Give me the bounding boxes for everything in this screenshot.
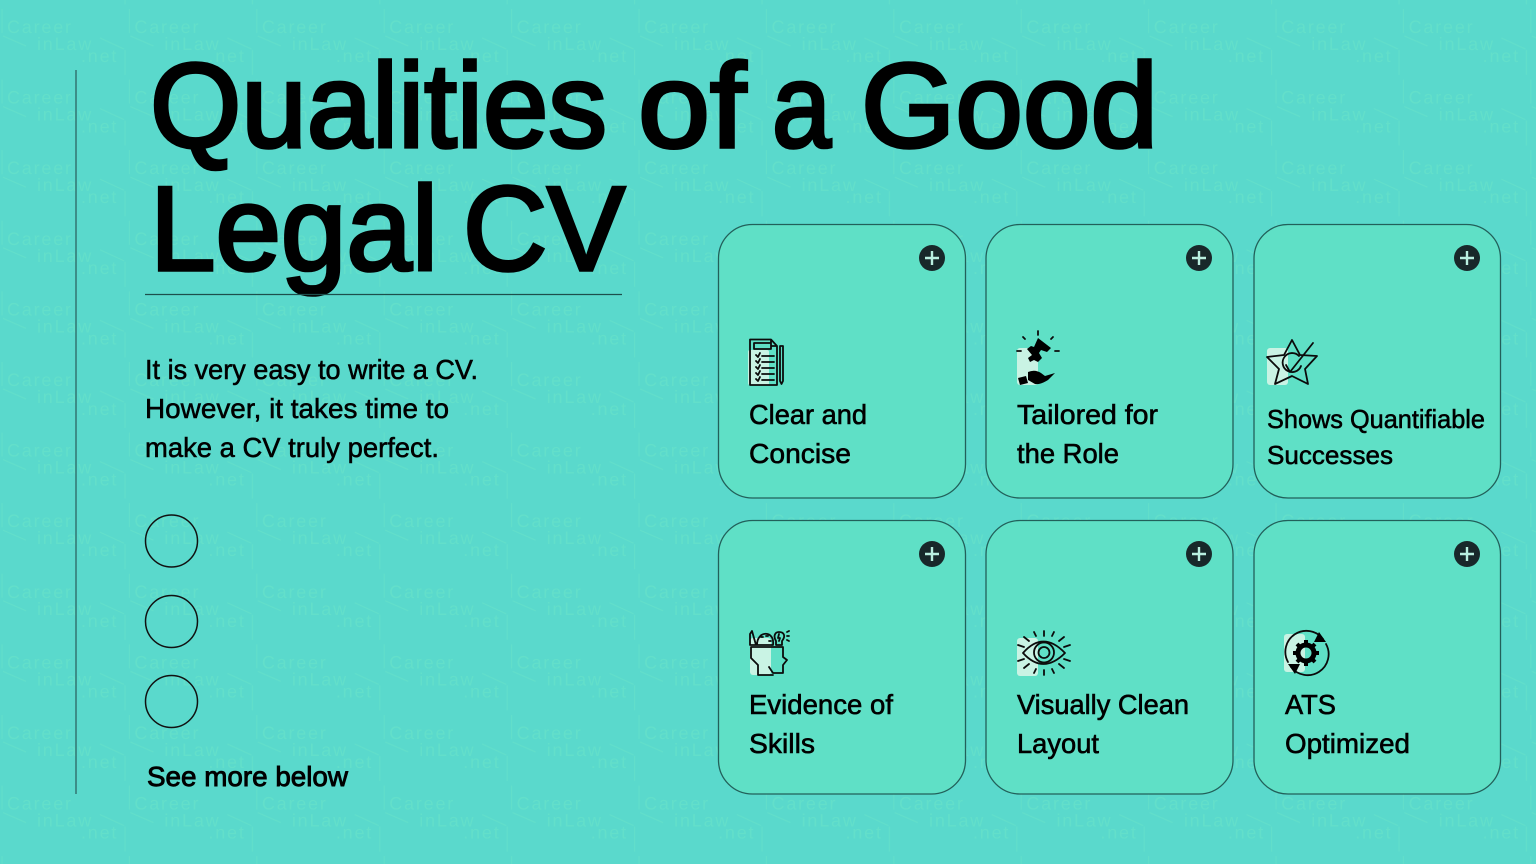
watermark text: Career Career Career Career Career Career Career Career Career Career Career Career — [7, 229, 1474, 249]
card: Shows Quantifiable Successes — [1254, 224, 1500, 498]
card: Evidence of Skills: Skills — [749, 728, 815, 759]
card: Shows Quantifiable Successes: Shows Quantifiable — [1267, 404, 1485, 434]
icon: eye — [1017, 631, 1070, 676]
watermark text: .net .net .net .net .net .net .net .net .net .net .net .net — [81, 328, 1520, 348]
title: Good — [861, 39, 1158, 173]
watermark text: inLaw inLaw inLaw inLaw inLaw inLaw inLaw inLaw inLaw inLaw inLaw inLaw — [37, 458, 1495, 478]
watermark text: inLaw inLaw inLaw inLaw inLaw inLaw inLaw inLaw inLaw inLaw inLaw inLaw — [37, 175, 1495, 195]
watermark text: Career Career Career Career Career Career Career Career Career Career Career Career — [7, 723, 1474, 743]
card: Visually Clean Layout: Visually Clean — [1017, 689, 1189, 720]
intro text: However, it takes time to — [145, 393, 449, 424]
card: Shows Quantifiable Successes: Successes — [1267, 440, 1393, 470]
watermark text: inLaw inLaw inLaw inLaw inLaw inLaw inLaw inLaw inLaw inLaw inLaw inLaw — [37, 246, 1495, 266]
watermark text: inLaw inLaw inLaw inLaw inLaw inLaw inLaw inLaw inLaw inLaw inLaw inLaw — [37, 316, 1495, 336]
watermark text: inLaw inLaw inLaw inLaw inLaw inLaw inLaw inLaw inLaw inLaw inLaw inLaw — [37, 105, 1495, 125]
title: a — [772, 39, 831, 173]
watermark text: inLaw inLaw inLaw inLaw inLaw inLaw inLaw inLaw inLaw inLaw inLaw inLaw — [37, 811, 1495, 831]
icon: star with check — [1267, 340, 1317, 385]
watermark text: .net .net .net .net .net .net .net .net .net .net .net .net — [81, 681, 1520, 701]
watermark text: .net .net .net .net .net .net .net .net .net .net .net .net — [81, 258, 1520, 278]
title: Qualities — [150, 39, 607, 173]
card: Visually Clean Layout: Layout — [1017, 728, 1099, 759]
card: Evidence of Skills: Evidence of — [749, 689, 893, 720]
watermark text: Career Career Career Career Career Career Career Career Career Career Career Career — [7, 88, 1474, 108]
watermark text: .net .net .net .net .net .net .net .net .net .net .net .net — [81, 117, 1520, 137]
watermark text: Career Career Career Career Career Career Career Career Career Career Career Career — [7, 511, 1474, 531]
title: CV — [463, 162, 625, 296]
plus button — [1454, 541, 1480, 567]
card: Visually Clean Layout — [986, 520, 1233, 794]
watermark text: inLaw inLaw inLaw inLaw inLaw inLaw inLaw inLaw inLaw inLaw inLaw inLaw — [37, 669, 1495, 689]
card: ATS Optimized — [1254, 520, 1500, 794]
title: Legal — [150, 162, 438, 296]
watermark text: inLaw inLaw inLaw inLaw inLaw inLaw inLaw inLaw inLaw inLaw inLaw inLaw — [37, 34, 1495, 54]
watermark text: Career Career Career Career Career Career Career Career Career Career Career Career — [7, 441, 1474, 461]
watermark text: Career Career Career Career Career Career Career Career Career Career Career Career — [7, 299, 1474, 319]
title — [150, 39, 1158, 296]
card: Tailored for the Role: the Role — [1017, 438, 1119, 469]
icon: puzzle piece in hand — [1017, 331, 1059, 385]
card: Clear and Concise — [718, 224, 966, 498]
plus button — [1186, 245, 1212, 271]
card: ATS Optimized: Optimized — [1285, 728, 1410, 759]
card: Clear and Concise: Clear and — [749, 399, 867, 430]
card: Evidence of Skills — [718, 520, 966, 794]
watermark text: Career Career Career Career Career Career Career Career Career Career Career Career — [7, 370, 1474, 390]
intro text: make a CV truly perfect. — [145, 432, 439, 463]
intro text: It is very easy to write a CV. — [145, 354, 478, 385]
watermark text: Career Career Career Career Career Career Career Career Career Career Career Career — [7, 17, 1474, 37]
title: of — [638, 39, 747, 173]
intro text — [145, 354, 478, 463]
watermark text: .net .net .net .net .net .net .net .net .net .net .net .net — [81, 46, 1520, 66]
watermark text: .net .net .net .net .net .net .net .net .net .net .net .net — [81, 752, 1520, 772]
plus button — [1186, 541, 1212, 567]
icon: checklist and pencil — [748, 340, 783, 385]
watermark text: .net .net .net .net .net .net .net .net .net .net .net .net — [81, 187, 1520, 207]
see more label: See more below — [147, 761, 349, 792]
watermark text: Career Career Career Career Career Career Career Career Career Career Career Career — [7, 794, 1474, 814]
card: Clear and Concise: Concise — [749, 438, 851, 469]
watermark text: .net .net .net .net .net .net .net .net .net .net .net .net — [81, 399, 1520, 419]
watermark text: .net .net .net .net .net .net .net .net .net .net .net .net — [81, 470, 1520, 490]
watermark text: .net .net .net .net .net .net .net .net .net .net .net .net — [81, 540, 1520, 560]
watermark text: Career Career Career Career Career Career Career Career Career Career Career Career — [7, 158, 1474, 178]
card: Tailored for the Role: Tailored for — [1017, 399, 1158, 430]
watermark text: inLaw inLaw inLaw inLaw inLaw inLaw inLaw inLaw inLaw inLaw inLaw inLaw — [37, 528, 1495, 548]
watermark text: Career Career Career Career Career Career Career Career Career Career Career Career — [7, 652, 1474, 672]
watermark text: inLaw inLaw inLaw inLaw inLaw inLaw inLaw inLaw inLaw inLaw inLaw inLaw — [37, 387, 1495, 407]
watermark text: .net .net .net .net .net .net .net .net .net .net .net .net — [81, 823, 1520, 843]
card: ATS Optimized: ATS — [1285, 689, 1336, 720]
empty circles — [146, 515, 198, 728]
plus button — [919, 541, 945, 567]
icon: gear cycle — [1284, 631, 1329, 675]
plus button — [919, 245, 945, 271]
plus button — [1454, 245, 1480, 271]
watermark text: Career Career Career Career Career Career Career Career Career Career Career Career — [7, 582, 1474, 602]
card: Tailored for the Role — [986, 224, 1233, 498]
watermark text: .net .net .net .net .net .net .net .net .net .net .net .net — [81, 611, 1520, 631]
watermark text: inLaw inLaw inLaw inLaw inLaw inLaw inLaw inLaw inLaw inLaw inLaw inLaw — [37, 740, 1495, 760]
watermark text: inLaw inLaw inLaw inLaw inLaw inLaw inLaw inLaw inLaw inLaw inLaw inLaw — [37, 599, 1495, 619]
icon: head with ideas — [750, 631, 789, 675]
